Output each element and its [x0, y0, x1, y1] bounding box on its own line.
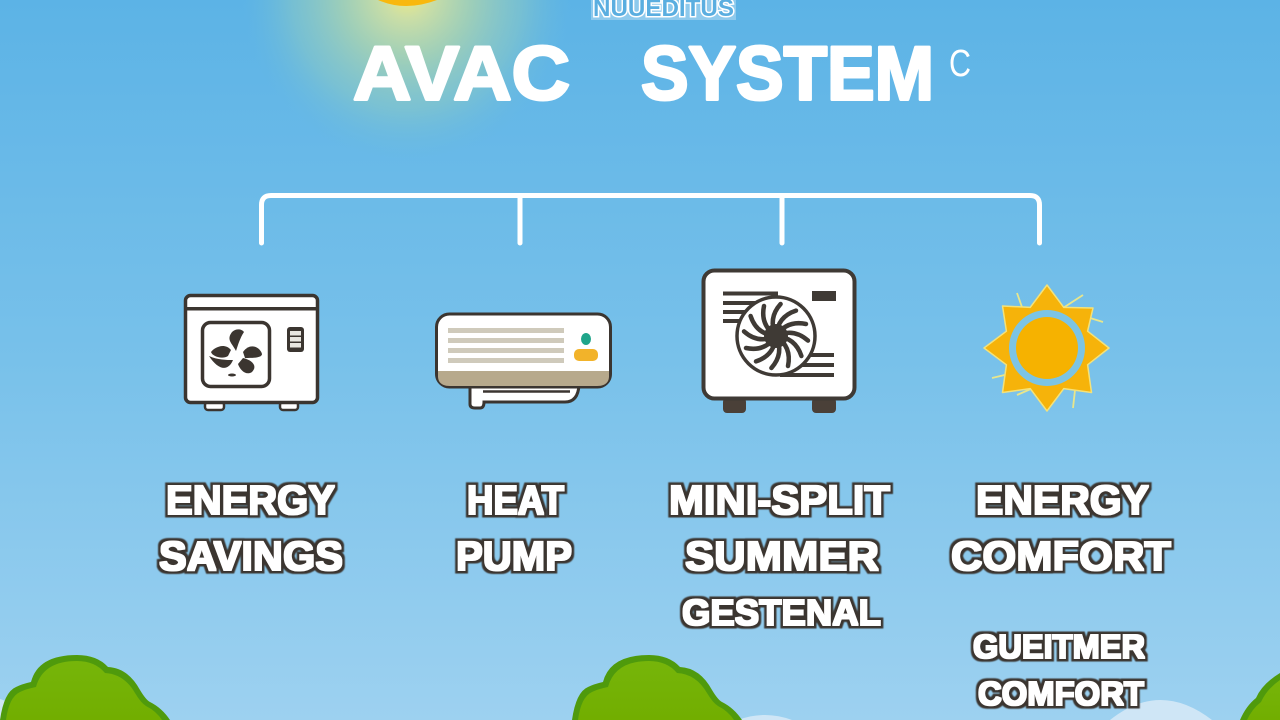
connector bracket — [262, 196, 1040, 243]
label: heat pump: PUMP — [456, 533, 572, 579]
label: mini-split summer gestenal: SUMMER — [685, 533, 879, 579]
label: mini-split summer gestenal: GESTENAL — [682, 592, 881, 633]
title: SYSTEM — [641, 32, 934, 116]
label: mini-split summer gestenal — [669, 477, 890, 633]
title: AVAC — [353, 32, 570, 116]
bush left — [0, 655, 170, 720]
title: C — [949, 43, 971, 85]
label: gueitmer comfort — [973, 628, 1145, 712]
label: gueitmer comfort: COMFORT — [978, 675, 1144, 712]
label: mini-split summer gestenal: MINI-SPLIT — [669, 477, 890, 523]
icon: wall heat pump unit — [436, 314, 610, 408]
label: energy savings: SAVINGS — [159, 533, 343, 579]
label: energy comfort: ENERGY — [976, 477, 1149, 523]
clouds — [0, 699, 1212, 720]
label: gueitmer comfort: GUEITMER — [973, 628, 1145, 665]
label: energy savings — [159, 477, 343, 579]
label: heat pump — [456, 477, 572, 579]
label: energy comfort: COMFORT — [951, 533, 1171, 579]
icon: mini-split condenser — [704, 270, 854, 413]
bush right — [1240, 673, 1280, 720]
bush centre — [572, 655, 742, 720]
label: heat pump: HEAT — [467, 477, 564, 523]
label: energy comfort — [951, 477, 1171, 579]
label: energy savings: ENERGY — [166, 477, 335, 523]
title — [353, 32, 971, 116]
sun glow at top — [240, 0, 574, 162]
icon: outdoor AC unit — [185, 296, 318, 410]
icon: sun — [984, 285, 1109, 411]
